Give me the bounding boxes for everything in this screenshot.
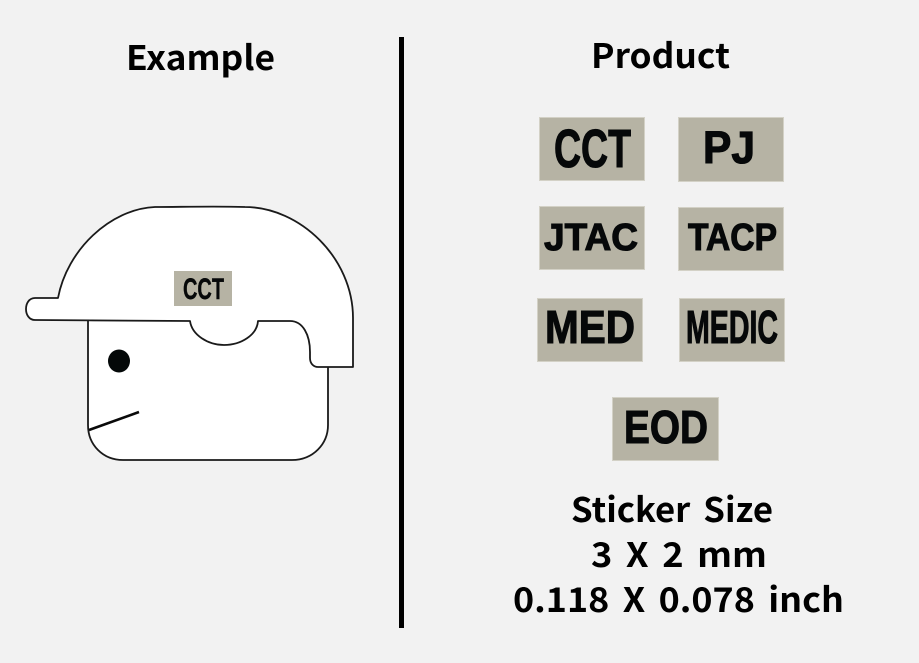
sticker: EOD: EOD xyxy=(624,401,708,453)
sticker size text: 0.118 X 0.078 inch xyxy=(513,573,844,622)
illustration: head wearing helmet xyxy=(26,207,353,460)
sticker size text: Sticker Size xyxy=(571,483,773,532)
heading: Example: Example xyxy=(126,31,275,80)
sticker: MEDIC: MEDIC xyxy=(686,301,778,353)
helmet xyxy=(26,207,353,367)
sticker: TACP xyxy=(678,208,784,270)
mouth xyxy=(89,412,139,430)
sticker: CCT: CCT xyxy=(554,119,631,179)
helmet sticker: CCT xyxy=(174,271,232,306)
sticker: PJ: PJ xyxy=(703,122,755,173)
vertical divider xyxy=(399,37,404,628)
sticker: JTAC xyxy=(540,206,644,270)
icon: eye xyxy=(108,350,130,372)
sticker: CCT xyxy=(540,118,644,180)
sticker: JTAC: JTAC xyxy=(544,217,638,259)
sticker: PJ xyxy=(678,118,784,182)
helmet sticker: CCT: CCT xyxy=(183,273,224,306)
sticker: MEDIC xyxy=(680,298,784,362)
heading: Product: Product xyxy=(591,29,730,78)
sticker size text: 3 X 2 mm xyxy=(591,528,767,577)
sticker: TACP: TACP xyxy=(688,217,777,259)
sticker size text xyxy=(513,483,844,622)
face xyxy=(88,321,328,460)
sticker: MED: MED xyxy=(545,301,635,353)
